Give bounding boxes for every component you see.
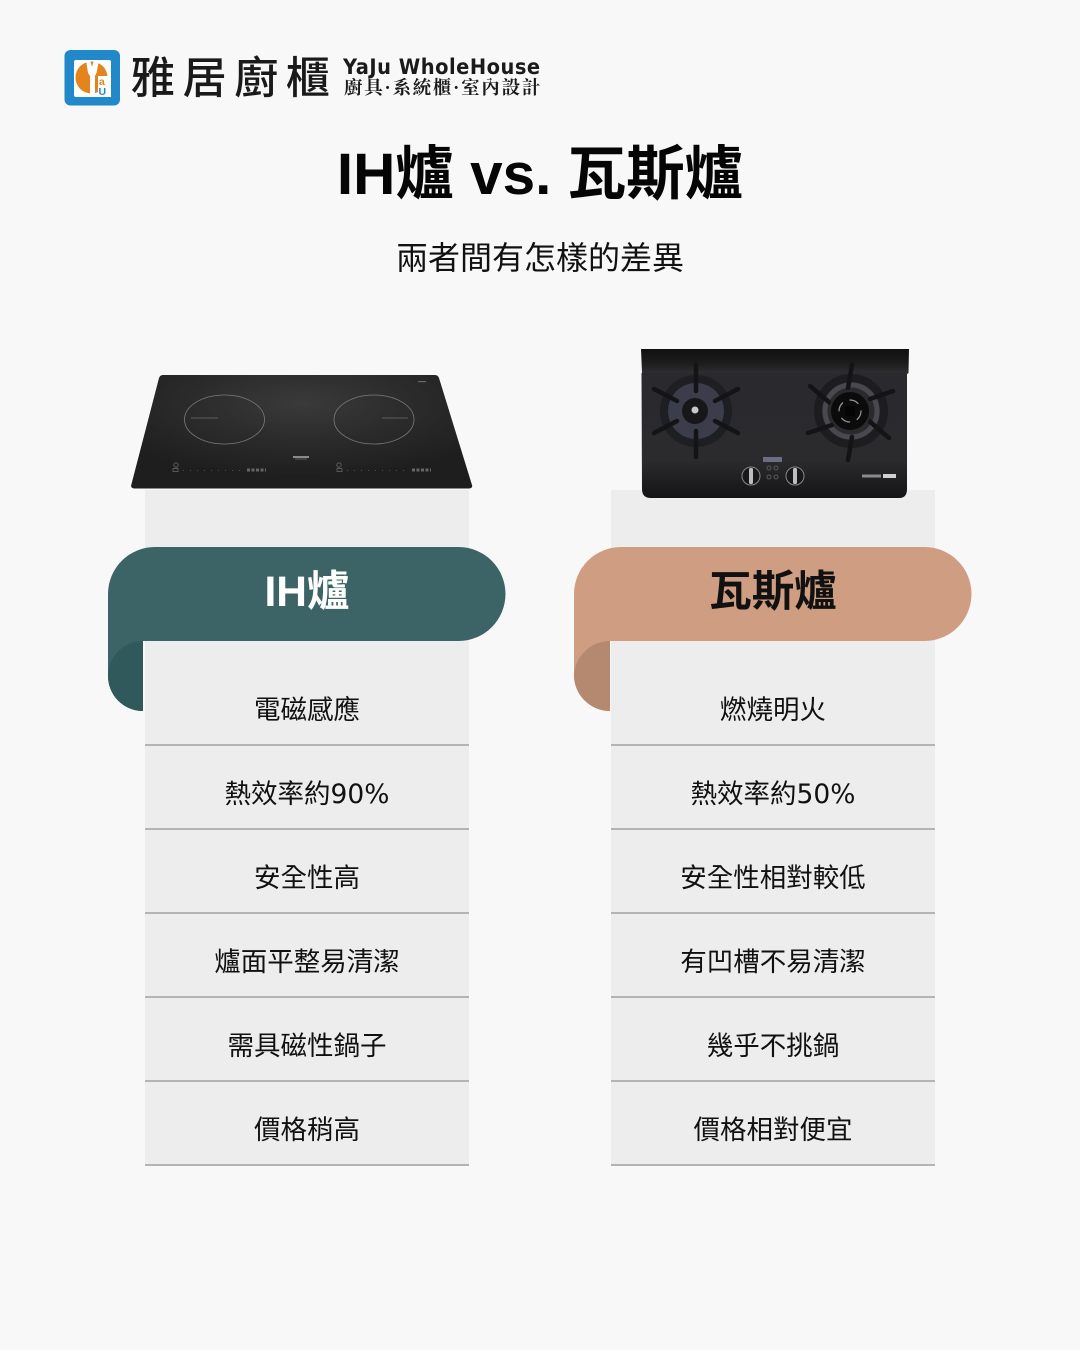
row: principle: 燃燒明火 — [720, 688, 826, 727]
logo english name: YaJu WholeHouse — [343, 55, 541, 80]
row: safety: 安全性高 — [254, 856, 360, 895]
right burner — [808, 365, 893, 460]
logo tagline: 廚具·系統櫃·室內設計 — [344, 79, 542, 99]
illustration: gas stove — [641, 349, 909, 498]
row: efficiency — [145, 746, 469, 830]
title: IH爐 vs. 瓦斯爐 — [337, 142, 743, 207]
ribbon: gas stove — [574, 547, 972, 711]
logo — [64, 50, 542, 106]
row: efficiency: 熱效率約50% — [691, 779, 855, 810]
row: cookware — [611, 998, 935, 1082]
subtitle: 兩者間有怎樣的差異 — [396, 240, 684, 276]
row: efficiency — [611, 746, 935, 830]
row: principle: 電磁感應 — [254, 688, 360, 727]
illustration: IH cooktop — [131, 375, 472, 488]
ribbon: IH stove — [108, 547, 506, 711]
panel: gas stove — [611, 490, 935, 1166]
row: efficiency: 熱效率約90% — [225, 779, 389, 810]
row: safety — [611, 830, 935, 914]
row: price — [145, 1082, 469, 1166]
row: cleaning: 爐面平整易清潔 — [214, 940, 400, 979]
row: cleaning: 有凹槽不易清潔 — [680, 940, 866, 979]
left burner — [654, 365, 738, 457]
row: cookware — [145, 998, 469, 1082]
panel: IH stove — [145, 490, 469, 1166]
row: price: 價格稍高 — [254, 1108, 360, 1147]
row: safety — [145, 830, 469, 914]
row: cookware: 幾乎不挑鍋 — [707, 1024, 839, 1063]
row: cleaning — [611, 914, 935, 998]
row: principle — [145, 662, 469, 746]
row: cookware: 需具磁性鍋子 — [228, 1024, 386, 1063]
row: price — [611, 1082, 935, 1166]
ribbon heading: gas stove: 瓦斯爐 — [709, 568, 837, 616]
row: principle — [611, 662, 935, 746]
row: price: 價格相對便宜 — [694, 1108, 852, 1147]
row: safety: 安全性相對較低 — [680, 856, 866, 895]
logo chinese name: 雅居廚櫃 — [131, 54, 337, 103]
row: cleaning — [145, 914, 469, 998]
ribbon heading: IH stove: IH爐 — [264, 568, 350, 616]
icon: logo mark: a — [99, 76, 105, 88]
icon: logo mark — [64, 50, 120, 106]
controls — [742, 457, 896, 485]
icon: logo mark: U — [98, 86, 106, 98]
